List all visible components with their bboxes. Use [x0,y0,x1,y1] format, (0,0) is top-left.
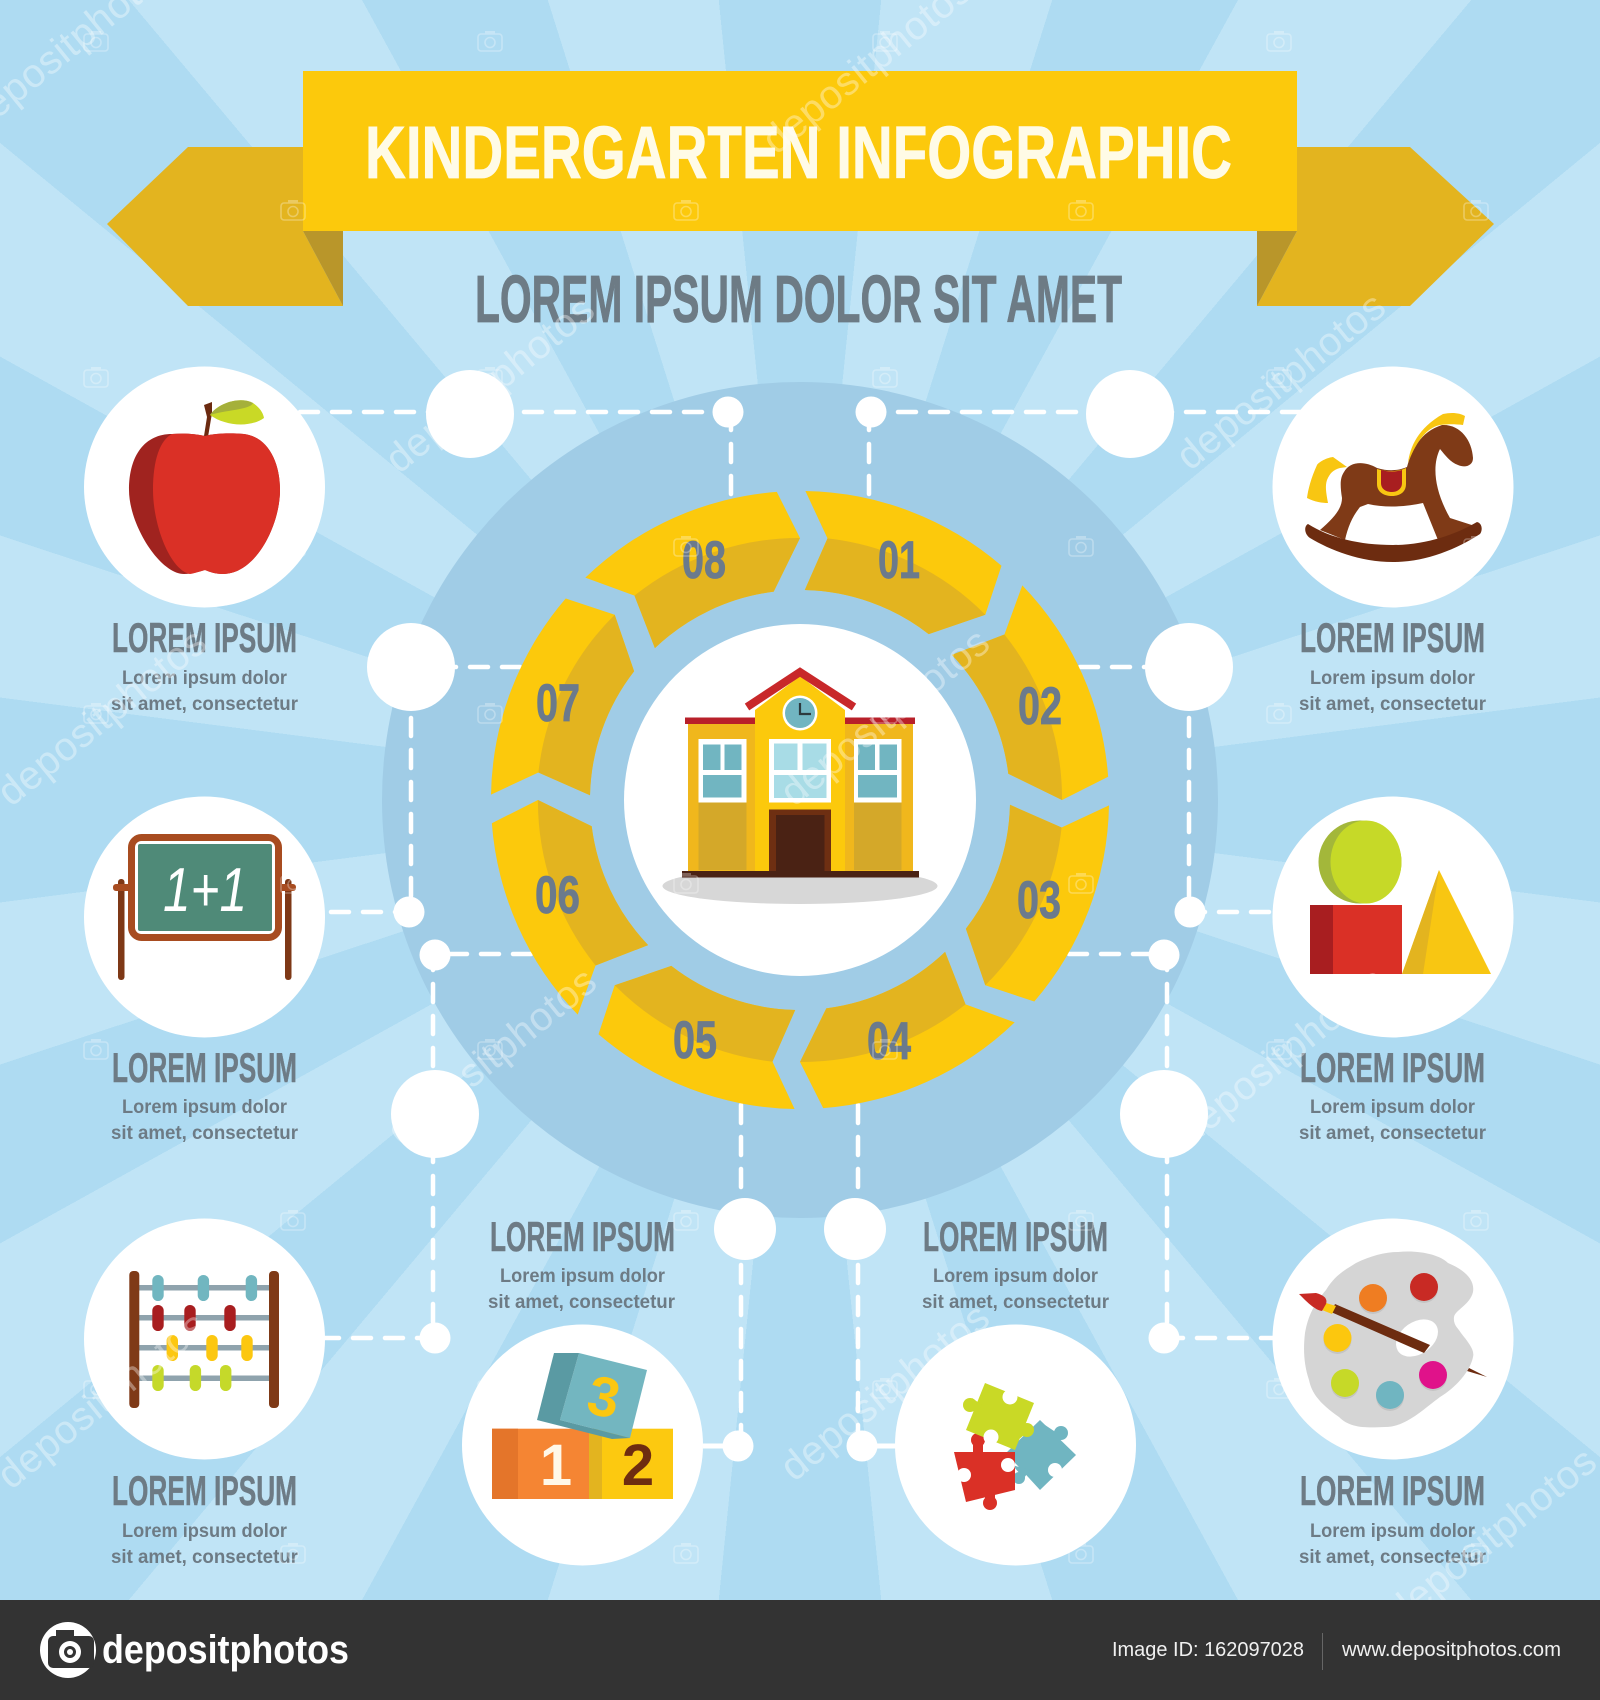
segment numbers: 02 [1018,677,1062,736]
segment numbers: 04 [867,1012,911,1071]
label: Lorem ipsum dolor [933,1265,1098,1287]
label: LOREM IPSUM [490,1213,675,1260]
segment numbers: 07 [536,674,580,733]
label: sit amet, consectetur [488,1291,675,1313]
label [1299,1044,1486,1144]
label: LOREM IPSUM [1300,1467,1485,1514]
segment numbers [535,531,1062,1071]
watermarks: depositphotos [377,287,603,482]
label: sit amet, consectetur [111,1122,298,1144]
left ribbon tail [107,147,343,306]
label: Lorem ipsum dolor [122,667,287,689]
label: Lorem ipsum dolor [1310,667,1475,689]
icon: apple [129,400,280,574]
image id: Image ID: 162097028 [1112,1639,1304,1661]
icon: number blocks: 1 [540,1433,572,1498]
label: LOREM IPSUM [923,1213,1108,1260]
label [111,1467,298,1568]
banner [107,71,1494,306]
icon: ball, cube and pyramid [1310,820,1491,974]
icon: puzzle pieces [954,1383,1076,1510]
ring of eight segments [439,439,1161,1161]
label: LOREM IPSUM [112,614,297,661]
label [111,614,298,715]
watermarks: depositphotos [772,1295,998,1490]
central large circle [382,382,1218,1218]
label: sit amet, consectetur [111,693,298,715]
icon: chalkboard [113,838,296,980]
icon: rocking horse [1305,413,1482,562]
icon: chalkboard: 1+1 [163,856,247,925]
label [111,1044,298,1144]
panel: abacus [84,1218,325,1568]
label: Lorem ipsum dolor [500,1265,665,1287]
watermarks: depositphotos [1168,959,1394,1154]
icon: school building [662,672,938,904]
label: LOREM IPSUM [1300,1044,1485,1091]
watermarks: depositphotos [772,620,998,815]
label: LOREM IPSUM [1300,614,1485,661]
segment numbers: 05 [673,1011,717,1070]
subtitle: LOREM IPSUM DOLOR SIT AMET [475,262,1122,337]
panel: toy shapes [1272,796,1514,1144]
label: sit amet, consectetur [1299,1546,1486,1568]
connector network [300,370,1300,1462]
icon: number blocks [492,1353,673,1499]
label: LOREM IPSUM [112,1467,297,1514]
panel: paint palette [1272,1218,1514,1568]
label: sit amet, consectetur [1299,1122,1486,1144]
segment numbers: 03 [1017,871,1061,930]
panel: podium blocks [462,1213,703,1566]
label: Lorem ipsum dolor [1310,1096,1475,1118]
panel: puzzle [895,1213,1136,1566]
label [1299,1467,1486,1568]
small connector nodes [394,396,1206,1462]
icon: number blocks: 3 [582,1362,626,1431]
panel: chalkboard [84,796,325,1144]
icon: abacus [129,1271,279,1408]
segment numbers: 08 [682,531,726,590]
banner panel [303,71,1297,231]
large connector nodes [367,370,1233,1260]
label [922,1213,1109,1313]
footer bar [0,1600,1600,1700]
right ribbon tail [1257,147,1494,306]
label: Lorem ipsum dolor [1310,1520,1475,1542]
label [1299,614,1486,715]
label: sit amet, consectetur [1299,693,1486,715]
icon: palette and brush [1299,1252,1487,1427]
label: Lorem ipsum dolor [122,1096,287,1118]
watermarks: depositphotos [1168,284,1394,479]
segment numbers: 01 [878,531,920,590]
segment numbers: 06 [535,866,580,925]
icon: number blocks: 2 [622,1433,654,1498]
label: Lorem ipsum dolor [122,1520,287,1542]
panel: rocking horse [1272,366,1514,715]
panel: apple [84,366,325,715]
watermarks: depositphotos [1379,1439,1600,1634]
label: LOREM IPSUM [112,1044,297,1091]
logo wordmark: depositphotos [102,1628,349,1672]
label [488,1213,675,1313]
website: www.depositphotos.com [1341,1639,1561,1661]
icon: logo camera [40,1622,96,1678]
center white circle [624,624,976,976]
title: KINDERGARTEN INFOGRAPHIC [365,111,1232,194]
label: sit amet, consectetur [111,1546,298,1568]
label: sit amet, consectetur [922,1291,1109,1313]
watermarks: depositphotos [379,959,605,1154]
